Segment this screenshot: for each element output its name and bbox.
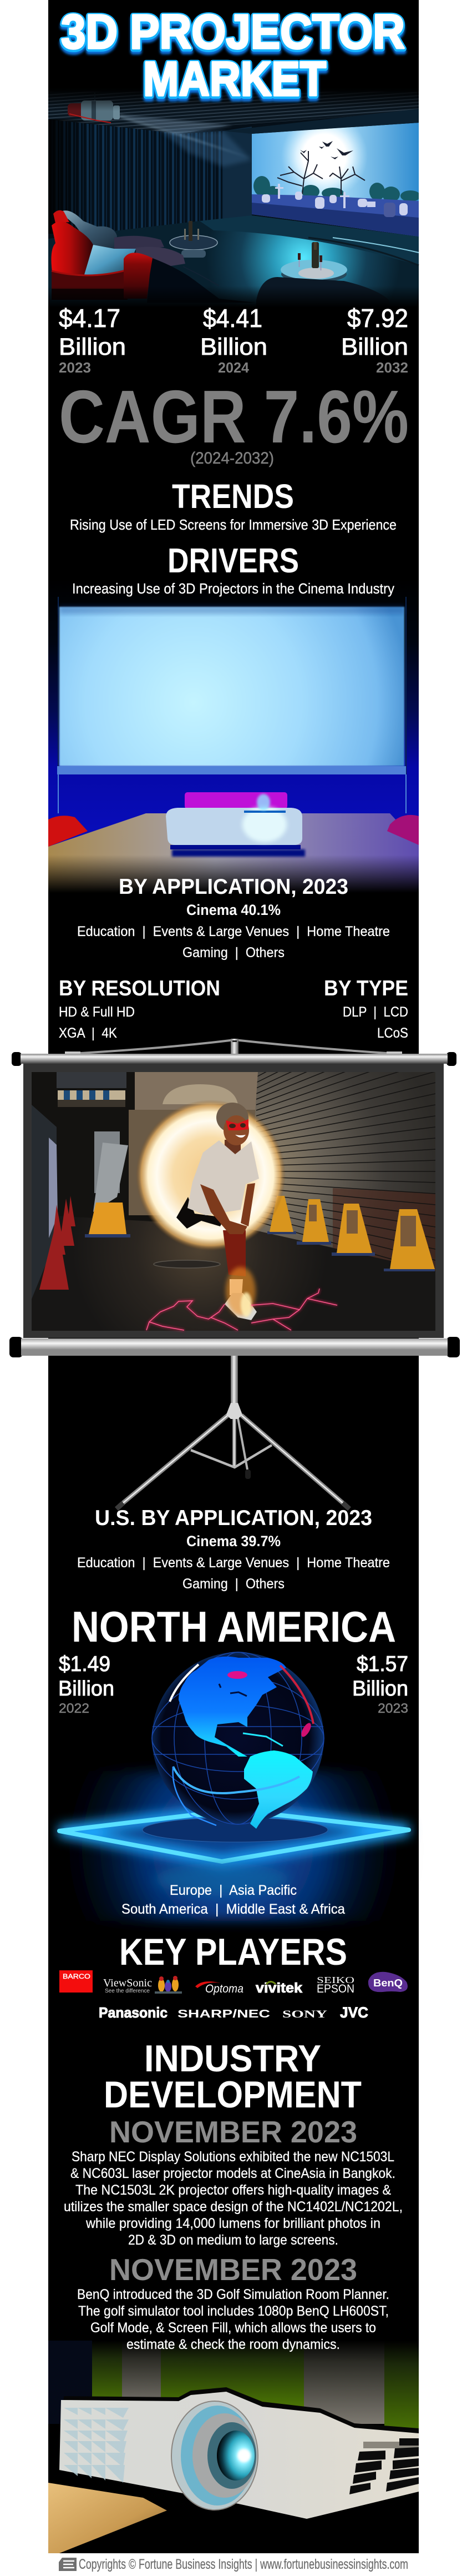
- bottom fade: [48, 286, 419, 308]
- key players heading: KEY PLAYERS: [119, 1931, 347, 1973]
- development 1 text: while providing 14,000 lumens for brilliant photos in: [85, 2216, 380, 2231]
- grid lines: [152, 1652, 324, 1824]
- brick lines: [256, 1072, 435, 1261]
- arms: [200, 1184, 247, 1234]
- floor: [48, 221, 419, 308]
- North America value 2023: Billion: [352, 1677, 408, 1700]
- logo: Barco: BARCO: [63, 1973, 90, 1980]
- logo: Optoma: [195, 1981, 243, 1995]
- screen hanger: [65, 1039, 402, 1054]
- development 1 text: The NC1503L 2K projector offers high-quality images &: [75, 2182, 391, 2198]
- caribbean islands: [243, 1733, 283, 1746]
- bottom roller: [9, 1337, 460, 1357]
- trends heading: TRENDS: [172, 477, 294, 515]
- image bottom fade: [48, 855, 419, 893]
- by type: LCoS: [377, 1025, 408, 1041]
- left vents: [64, 2408, 129, 2483]
- by type: BY TYPE: [324, 977, 408, 1000]
- front chair red: [51, 222, 93, 276]
- lens assembly: [171, 2401, 258, 2510]
- frame posts below ledge: [58, 774, 59, 813]
- glow portal: [136, 1100, 286, 1251]
- North America value 2023: 2023: [378, 1701, 408, 1716]
- industry development heading: INDUSTRY: [144, 2037, 321, 2080]
- lit arch: [163, 1084, 238, 1104]
- top roller: [12, 1052, 456, 1066]
- North America value 2022: $1.49: [59, 1652, 110, 1676]
- U.S. application list: Gaming | Others: [182, 1576, 285, 1592]
- development 2 text: [77, 2287, 389, 2352]
- image: projector and blue screen: [48, 579, 419, 893]
- glass table with bottles: [170, 221, 217, 258]
- development 2 text: BenQ introduced the 3D Golf Simulation Room Planner.: [77, 2287, 389, 2302]
- market value 2023: Billion: [59, 334, 126, 360]
- top fade: [48, 88, 419, 111]
- by resolution: BY RESOLUTION: [59, 977, 220, 1000]
- second red chair: [124, 253, 158, 299]
- cinema share: Cinema 40.1%: [186, 902, 281, 918]
- white projector: [166, 794, 305, 857]
- market value 2024: 2024: [218, 359, 250, 376]
- tombstones: [262, 184, 408, 217]
- trends text: Rising Use of LED Screens for Immersive 3D Experience: [70, 516, 397, 533]
- logo: Vivitek: vivitek: [256, 1980, 302, 1996]
- hair: [216, 1103, 248, 1133]
- logo: Seiko Epson: [317, 1975, 354, 1995]
- distant bushes: [253, 176, 420, 202]
- magenta spot: [227, 1671, 247, 1679]
- standing leg: [223, 1230, 246, 1276]
- development 2 text: estimate & check the room dynamics.: [126, 2337, 340, 2352]
- CAGR headline: CAGR 7.6%: [59, 375, 409, 459]
- projector body: [59, 2392, 419, 2519]
- lit passage: [129, 1110, 258, 1215]
- development 1 text: 2D & 3D on medium to large screens.: [128, 2232, 338, 2248]
- wall panels: [48, 2341, 419, 2438]
- title: 3D PROJECTOR: [61, 5, 405, 59]
- table top: [48, 813, 419, 893]
- flame on foot: [226, 1267, 256, 1317]
- right vents: [349, 2438, 419, 2494]
- reddish wall base: [333, 1188, 435, 1271]
- sofa pieces: [114, 236, 164, 250]
- legs: [123, 1415, 228, 1503]
- by type: [324, 977, 408, 1041]
- screen picture: glowing runner in alley: [32, 1072, 435, 1332]
- date 1: NOVEMBER 2023: [109, 2115, 357, 2149]
- logo: ViewSonic: ViewSonic: [103, 1977, 152, 1989]
- application list: Gaming | Others: [182, 945, 285, 960]
- back wall: [223, 127, 252, 222]
- logo: Seiko Epson: EPSON: [317, 1983, 354, 1995]
- sock and shoe: [230, 1279, 243, 1295]
- development 2 text: The golf simulator tool includes 1080p BenQ LH600ST,: [78, 2303, 389, 2319]
- market value 2032: [341, 304, 408, 376]
- market value 2023: [59, 304, 126, 376]
- drivers text: Increasing Use of 3D Projectors in the Cinema Industry: [72, 580, 394, 597]
- left wall: [32, 1105, 57, 1299]
- application list: Education | Events & Large Venues | Home Theatre: [77, 924, 390, 939]
- by resolution: HD & Full HD: [59, 1004, 135, 1020]
- development 1 text: [64, 2149, 403, 2248]
- by resolution: [59, 977, 220, 1041]
- logo: Sharp NEC: SHARP/NEC: [177, 2008, 270, 2020]
- North America landmass: [179, 1657, 286, 1757]
- U.S. by application heading: U.S. BY APPLICATION, 2023: [95, 1506, 372, 1530]
- title: 3D PROJECTOR: [61, 6, 405, 59]
- drivers heading: DRIVERS: [167, 542, 299, 580]
- ceiling projector: [68, 92, 120, 123]
- manhole: [154, 1260, 220, 1268]
- front chair seat: [84, 245, 136, 276]
- lip above screen: [223, 109, 419, 134]
- market value 2032: $7.92: [347, 304, 408, 333]
- title: MARKET: [143, 52, 326, 106]
- magenta chair right: [387, 815, 419, 845]
- market value 2032: 2032: [376, 359, 408, 376]
- bats: [300, 141, 353, 159]
- smile: [235, 1135, 246, 1138]
- globe on neon platform: [48, 1652, 419, 1921]
- white panels: [94, 1131, 120, 1193]
- striped awning: [58, 1090, 125, 1107]
- front chair base: [52, 270, 128, 299]
- U.S. application list: Education | Events & Large Venues | Home Theatre: [77, 1555, 390, 1571]
- footer: logo and copyright: [59, 2557, 408, 2572]
- projector top band: [61, 2387, 419, 2443]
- South America landmass: [244, 1750, 313, 1829]
- logo: BenQ: [368, 1972, 408, 1992]
- shorts: [176, 1197, 225, 1229]
- logo: Optoma: Optoma: [205, 1983, 243, 1995]
- projection screen: [9, 1052, 460, 1357]
- industry development heading: [104, 2037, 362, 2116]
- U.S. application list: [77, 1555, 390, 1592]
- application list: [77, 924, 390, 960]
- title: 3D PROJECTOR: [61, 8, 405, 62]
- hero image: home cinema room: [48, 88, 420, 308]
- table wood: [48, 2483, 167, 2553]
- brick wall: [247, 1072, 435, 1271]
- ceiling grate: [57, 1072, 126, 1088]
- market value 2024: [200, 304, 267, 376]
- development 1 text: & NC603L laser projector models at CineAsia in Bangkok.: [70, 2166, 395, 2181]
- CAGR period: (2024-2032): [190, 449, 274, 467]
- ground: [32, 1216, 435, 1331]
- mask: [226, 1119, 248, 1130]
- market value 2024: Billion: [200, 334, 267, 360]
- globe sphere: [152, 1652, 324, 1824]
- lava cracks: [146, 1289, 337, 1330]
- base glow: [155, 1863, 288, 1896]
- market value 2023: $4.17: [59, 304, 120, 333]
- curtain: [48, 119, 223, 234]
- neck: [225, 1140, 241, 1155]
- logo: Panasonic: Panasonic: [99, 2004, 167, 2021]
- development 2 date: NOVEMBER 2023: [109, 2252, 357, 2287]
- shirt: [187, 1140, 259, 1215]
- tripod stand: [116, 1356, 349, 1509]
- foreground seat: [256, 277, 389, 308]
- ceiling: [48, 92, 419, 134]
- ground: [252, 194, 419, 239]
- braces: [191, 1445, 272, 1467]
- moon: [283, 127, 366, 194]
- North America value 2023: $1.57: [357, 1652, 408, 1676]
- red cones: [39, 1196, 75, 1290]
- logo: Seiko Epson: SEIKO: [317, 1975, 354, 1985]
- top shading on screen: [59, 605, 404, 614]
- other regions: Europe | Asia Pacific: [170, 1883, 297, 1898]
- market value 2023: 2023: [59, 359, 91, 376]
- logo: ViewSonic: See the difference: [105, 1988, 150, 1994]
- North America value 2022: [58, 1652, 114, 1716]
- logo: Barco: [59, 1970, 93, 1993]
- development 1 text: utilizes the smaller space design of the NC1402L/NC1202L,: [64, 2199, 403, 2215]
- market value 2024: $4.41: [203, 304, 262, 333]
- dead trees: [277, 151, 365, 194]
- logo: ViewSonic: [103, 1976, 182, 1994]
- logo: Sony: SONY: [282, 2009, 327, 2020]
- hub: [226, 1403, 242, 1419]
- icon: Fortune Business Insights logo: [59, 2558, 77, 2571]
- title: [61, 5, 405, 109]
- North America value 2022: 2022: [59, 1701, 89, 1716]
- market value 2032: Billion: [341, 334, 408, 360]
- leg tips: [116, 1503, 349, 1509]
- lounge chairs left: [51, 210, 255, 303]
- neon platform: [59, 1815, 409, 1861]
- screen ledge: [57, 766, 406, 774]
- yellow cones: [267, 1196, 435, 1271]
- pebble wall: [135, 1072, 258, 1110]
- by application heading: BY APPLICATION, 2023: [119, 875, 348, 899]
- development 1 text: Sharp NEC Display Solutions exhibited the new NC1503L: [72, 2149, 394, 2165]
- runner: [176, 1103, 259, 1320]
- white arc highlight: [170, 1664, 199, 1702]
- screen frame: [23, 1064, 444, 1338]
- rear chair silver back: [60, 210, 117, 249]
- light beam: [119, 114, 251, 158]
- logo: BenQ: BenQ: [373, 1978, 403, 1989]
- blue orbit arc: [173, 1767, 300, 1793]
- other regions: [121, 1883, 345, 1917]
- purple object behind projector: [185, 792, 287, 809]
- industry development heading: DEVELOPMENT: [104, 2074, 362, 2116]
- logo: JVC: JVC: [340, 2004, 368, 2021]
- title: MARKET: [143, 53, 326, 107]
- image: white projector close-up: [48, 2341, 419, 2553]
- great lakes: [219, 1684, 247, 1696]
- development 2 text: Golf Mode, & Screen Fill, which allows the users to: [90, 2320, 376, 2336]
- red chair left: [48, 816, 88, 847]
- North America heading: NORTH AMERICA: [72, 1602, 396, 1651]
- North America value 2022: Billion: [58, 1677, 114, 1700]
- by resolution: XGA | 4K: [59, 1025, 117, 1041]
- dim frame posts beside screen: [58, 597, 59, 774]
- page background column: [48, 0, 419, 2553]
- title: MARKET: [143, 56, 326, 109]
- round table with bottle: [281, 242, 347, 283]
- yellow board: [89, 1203, 126, 1234]
- face: [224, 1115, 249, 1145]
- U.S. cinema share: Cinema 39.7%: [186, 1533, 281, 1549]
- projection screen scene: [252, 123, 419, 237]
- blue screen: [59, 607, 404, 766]
- black cushion: [147, 258, 255, 303]
- other regions: South America | Middle East & Africa: [121, 1901, 345, 1917]
- North America value 2023: [352, 1652, 408, 1716]
- red arc highlight: [280, 1666, 313, 1724]
- by type: DLP | LCD: [343, 1004, 408, 1020]
- stage riser: [200, 215, 419, 265]
